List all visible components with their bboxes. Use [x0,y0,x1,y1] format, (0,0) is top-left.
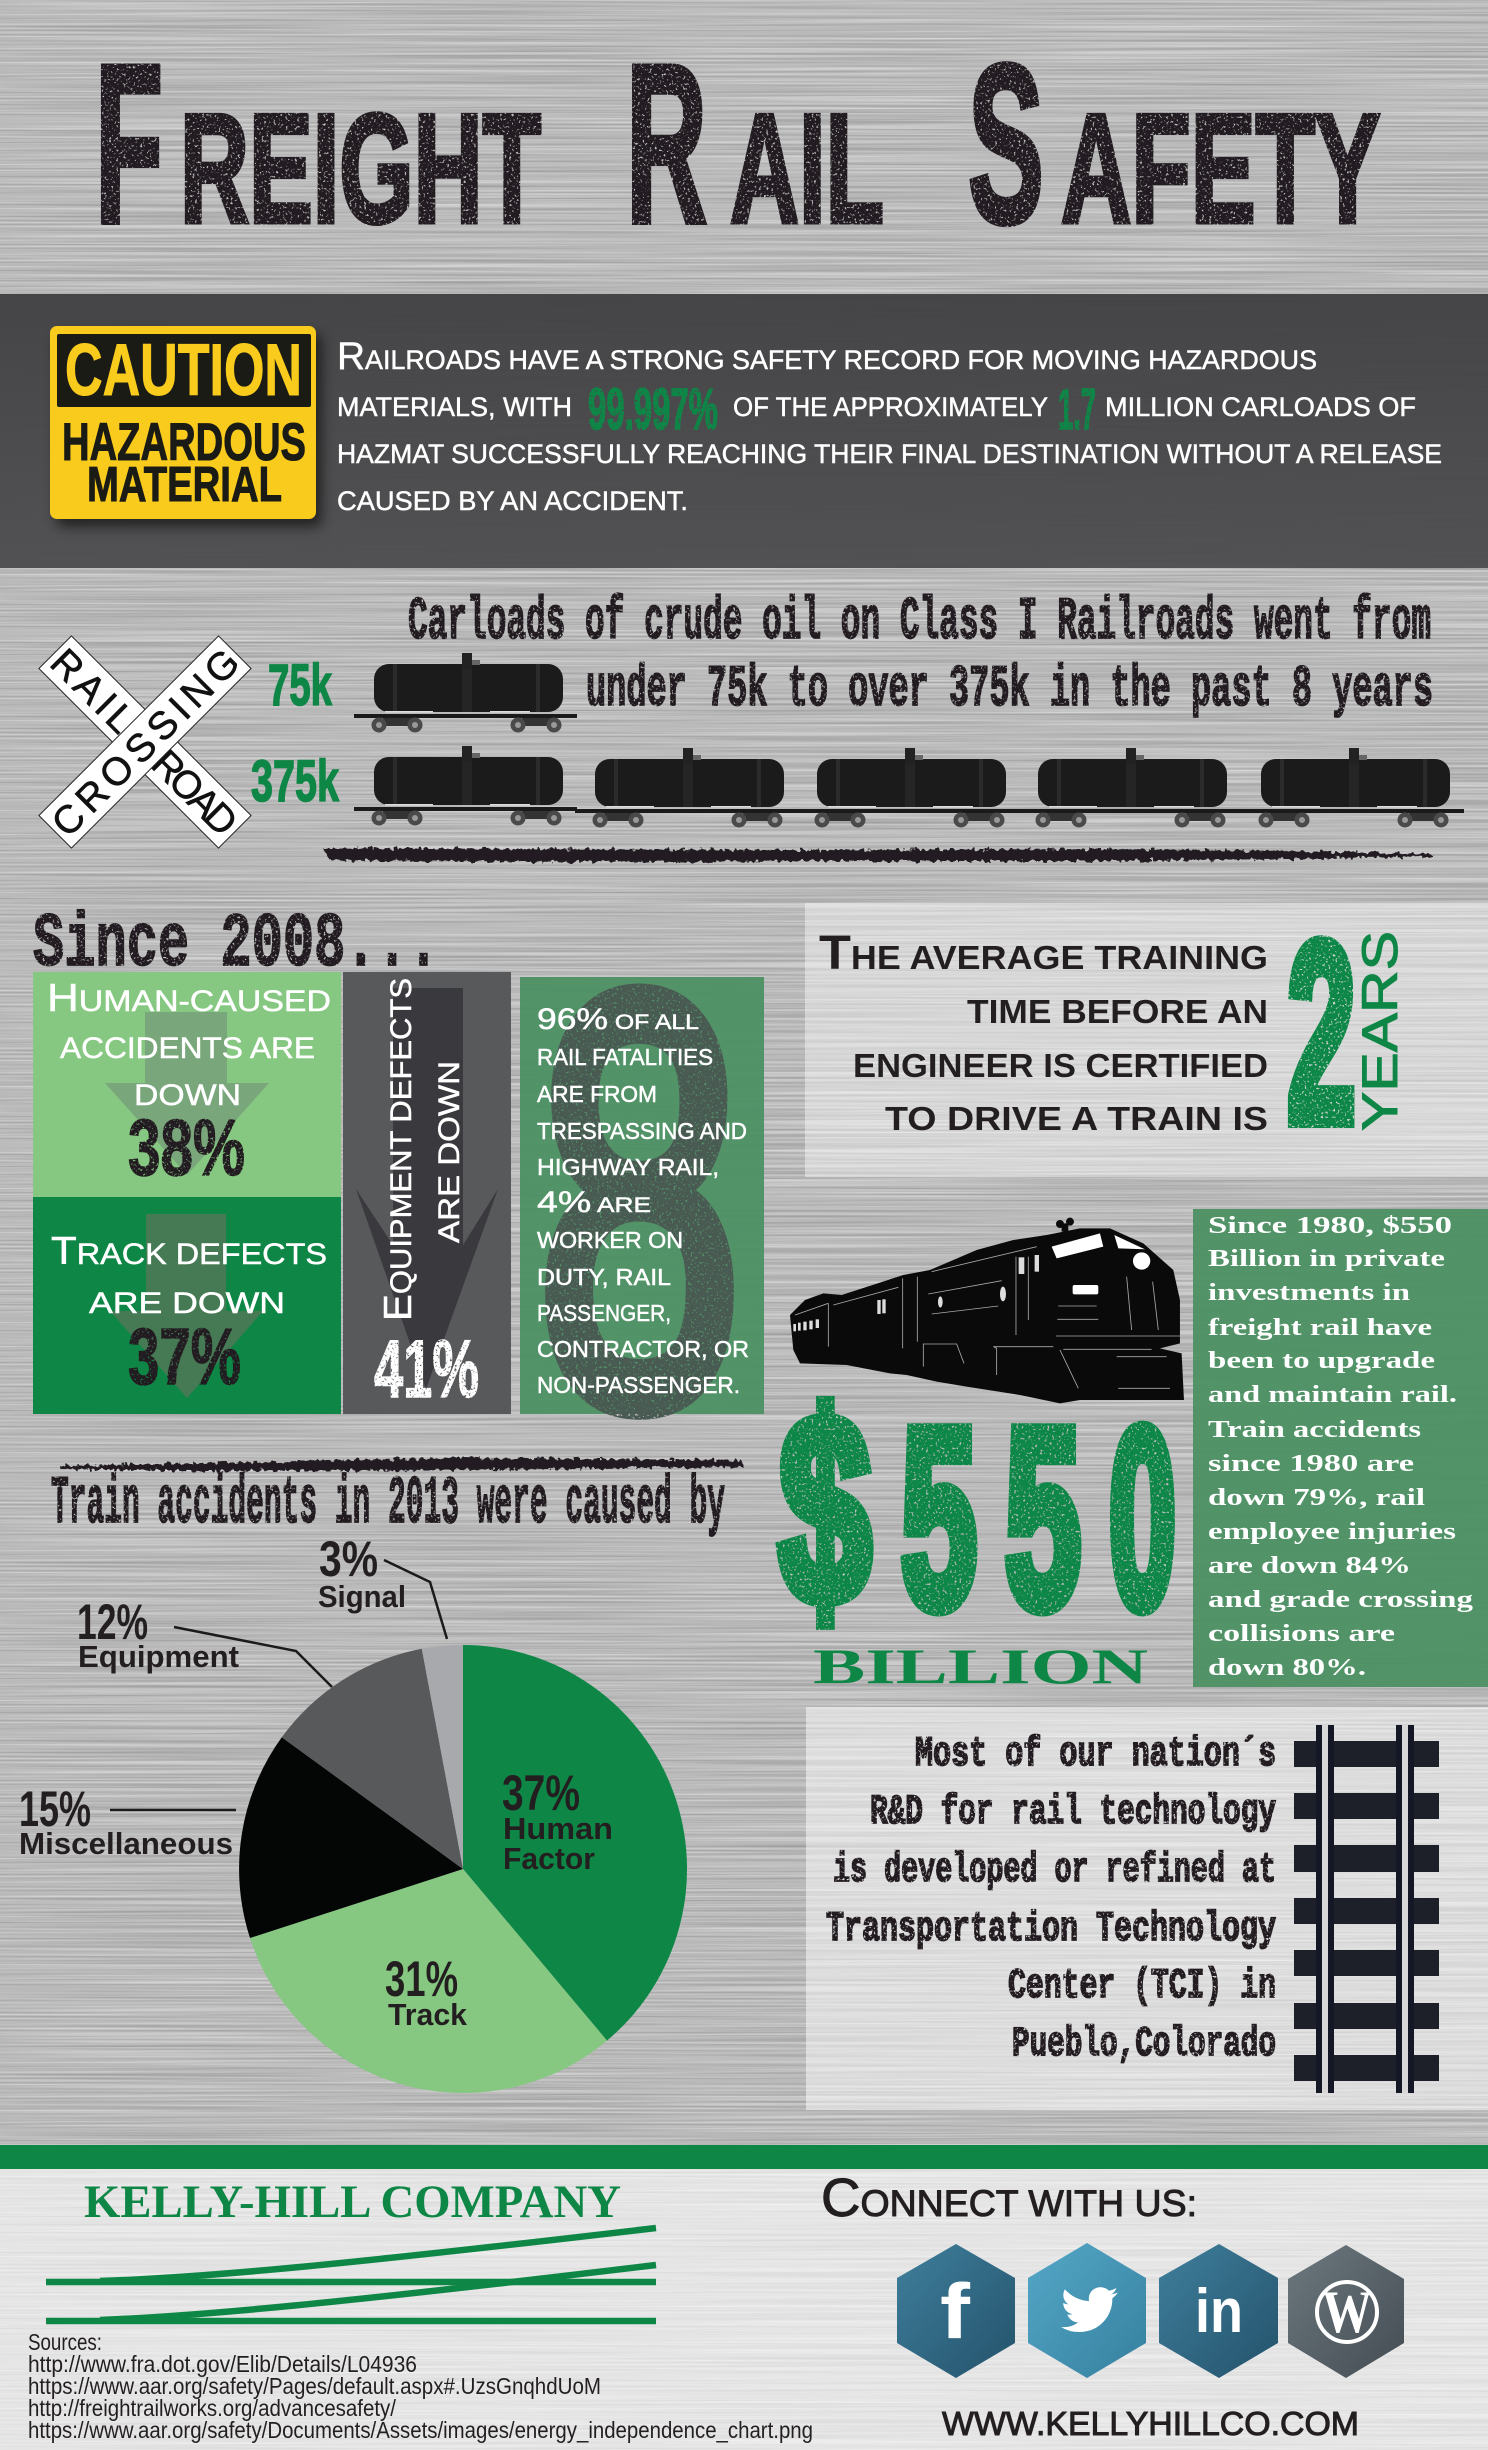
panel: research and development: Transportation Technology [826,1905,1276,1953]
label: 37 percent human factor: 37% [502,1765,580,1821]
label: 31 percent track: Track [388,1997,468,2032]
label: 37 percent human factor [502,1765,613,1876]
panel: 96 percent fatalities: 96% OF ALL [537,1003,699,1036]
title: R [626,17,707,270]
text block: hazmat safety record: 99.997% [588,377,718,442]
callout: 15 percent miscellaneous [19,1781,236,1861]
text block: hazmat safety record: HAZMAT SUCCESSFULLY REACHING THEIR FINAL DESTINATION WITHOUT A RELEASE [337,439,1442,469]
title: F [95,17,163,270]
panel: human-caused accidents: DOWN [134,1079,241,1112]
label: 37 percent human factor: Factor [503,1841,595,1876]
icon: facebook [897,2244,1015,2378]
icon: linkedin: in [1195,2277,1243,2346]
icon: caution hazardous material sign: HAZARDOUS [62,413,306,472]
label: website: WWW.KELLYHILLCO.COM [942,2405,1359,2442]
heading: carloads of crude oil [408,589,1433,723]
icon: caution hazardous material sign [50,326,322,527]
panel: private investment text: and maintain rail. [1208,1382,1457,1408]
title: REIGHT [180,82,541,255]
panel: 96 percent fatalities: RAIL FATALITIES [537,1044,713,1070]
panel: 96 percent fatalities: DUTY, RAIL [537,1264,671,1290]
label: 31 percent track: 31% [385,1951,458,2007]
icon: linkedin [1159,2244,1278,2378]
icon: large numeral eight: 8 [536,873,743,1527]
panel: training time: THE AVERAGE TRAINING [819,927,1268,980]
icon: caution hazardous material sign: CAUTION [65,330,302,411]
tank car row two, second [575,748,798,828]
callout: 12 percent equipment: 12% [77,1594,148,1650]
number: 550 dollars: $ [779,1360,871,1659]
icon: railroad crossing sign: CROSSING [44,641,248,845]
panel: 96 percent fatalities: NON-PASSENGER. [537,1372,740,1398]
panel: human-caused accidents: HUMAN-CAUSED [47,977,331,1020]
callout: 3 percent signal: 3% [319,1531,378,1587]
callout: 3 percent signal [318,1531,447,1639]
panel: 96 percent fatalities: CONTRACTOR, OR [537,1336,749,1362]
arrow: equipment defects down [356,988,498,1389]
icon: railroad crossing sign: RAIL [42,641,143,742]
panel: equipment defects: EQUIPMENT DEFECTS [377,978,420,1321]
panel: private investment text: Billion in private [1208,1246,1445,1272]
tank car row two, third [797,748,1020,828]
tank car row two, first [354,746,577,826]
panel: private investment text [1193,1209,1488,1687]
title: S [968,17,1044,270]
panel: 96 percent fatalities: ARE FROM [537,1081,657,1107]
panel: training time [805,890,1488,1177]
text block: hazmat safety record: OF THE APPROXIMATELY [733,392,1048,422]
label: years: YEARS [1352,931,1408,1131]
panel: research and development: Most of our nation´s [915,1730,1276,1778]
panel: 96 percent fatalities [520,873,764,1527]
heading: connect with us: CONNECT WITH US: [821,2168,1197,2228]
callout: 15 percent miscellaneous: Miscellaneous [19,1826,233,1861]
text block: hazmat safety record: 1.7 [1058,377,1096,442]
panel: 96 percent fatalities: 4% ARE [537,1186,651,1219]
heading: since 2008: Since 2008... [33,902,439,988]
panel: 96 percent fatalities: WORKER ON [537,1227,683,1253]
callout: 12 percent equipment: Equipment [78,1639,239,1674]
text block: sources: http://www.fra.dot.gov/Elib/Details/L04936 [28,2351,417,2377]
icon: locomotive train [790,1218,1184,1403]
icon: railroad crossing sign: ROAD [143,742,245,845]
icon: railway track [1294,1725,1439,2093]
logo: kelly-hill company: KELLY-HILL COMPANY [84,2176,621,2228]
tank car row two, fourth [1018,748,1241,828]
label: 75k: 75k [268,653,332,718]
panel: training time: TO DRIVE A TRAIN IS [885,1100,1268,1137]
infographic: freight rail safety: 0 [1109,1376,1176,1660]
icon: facebook: f [940,2267,971,2355]
panel: private investment text: employee injuries [1208,1519,1456,1545]
panel: equipment defects: 41% [374,1324,479,1415]
panel: private investment text: since 1980 are [1208,1451,1414,1477]
panel: 96 percent fatalities: HIGHWAY RAIL, [537,1154,719,1180]
panel: research and development: Pueblo,Colorado [1012,2020,1276,2068]
panel: research and development: R&D for rail technology [870,1788,1276,1836]
text block: sources: https://www.aar.org/safety/Documents/Assets/images/energy_independence_chart.png [28,2417,813,2443]
arrow: human-caused down [105,1012,269,1175]
title [95,17,1380,270]
callout: 12 percent equipment [77,1594,332,1687]
panel: private investment text: been to upgrade [1208,1348,1435,1374]
text block: hazmat safety record: RAILROADS HAVE A STRONG SAFETY RECORD FOR MOVING HAZARDOUS [337,335,1317,378]
panel: private investment text: and grade crossing [1208,1587,1473,1613]
logo: kelly-hill company [46,2176,656,2321]
panel: private investment text: are down 84% [1208,1553,1411,1579]
panel: research and development [806,1707,1488,2110]
callout: 3 percent signal: Signal [318,1579,406,1614]
panel: equipment defects [343,972,511,1415]
pie chart: accident causes [239,1645,687,2093]
text block: sources: https://www.aar.org/safety/Pages/default.aspx#.UzsGnqhdUoM [28,2373,601,2399]
panel: human-caused accidents [33,972,341,1197]
text block: hazmat safety record [337,335,1442,516]
panel: private investment text: Train accidents [1208,1417,1421,1443]
text block: sources: Sources: [28,2329,102,2355]
number: 550 dollars: 5 [901,1376,977,1660]
text block: hazmat safety record: CAUSED BY AN ACCIDENT. [337,486,688,516]
panel: private investment text: down 79%, rail [1208,1485,1425,1511]
panel: track defects: ARE DOWN [89,1287,285,1320]
label: 37 percent human factor: Human [503,1811,613,1846]
panel: 96 percent fatalities: PASSENGER, [537,1300,671,1326]
panel: hazardous materials band [0,294,1488,568]
icon: wordpress: W [1322,2279,1372,2345]
text block: sources [28,2329,813,2443]
label: billion: BILLION [813,1638,1148,1694]
text block: hazmat safety record: MILLION CARLOADS OF [1105,392,1416,422]
panel: private investment text: freight rail have [1208,1315,1432,1341]
panel: private investment text: investments in [1208,1280,1410,1306]
number: 550 dollars [779,1360,1176,1660]
panel: private investment text: Since 1980, $550 [1208,1213,1452,1239]
panel: track defects: TRACK DEFECTS [51,1230,327,1273]
title: AIL [730,82,884,255]
panel: equipment defects: ARE DOWN [433,1061,466,1243]
panel: track defects [33,1197,341,1414]
panel: research and development: Center (TCI) in [1008,1962,1276,2010]
arrow: track defects down [110,1214,263,1398]
label: 375k: 375k [251,749,340,814]
panel: human-caused accidents: 38% [128,1103,245,1192]
panel: 96 percent fatalities: TRESPASSING AND [537,1118,747,1144]
callout: 15 percent miscellaneous: 15% [19,1781,91,1837]
label: 31 percent track [385,1951,468,2032]
panel: training time: 2 [1287,890,1356,1176]
icon: caution hazardous material sign: MATERIAL [87,458,282,512]
tank car row two, fifth [1241,748,1464,828]
panel: training time: ENGINEER IS CERTIFIED [853,1047,1268,1084]
icon: wordpress [1288,2245,1404,2378]
icon: twitter [1028,2243,1146,2378]
panel: training time: TIME BEFORE AN [967,993,1268,1030]
number: 550 dollars: 5 [1005,1376,1081,1660]
panel: private investment text: down 80%. [1208,1655,1366,1681]
panel: human-caused accidents: ACCIDENTS ARE [60,1032,315,1065]
panel: research and development: is developed or refined at [833,1846,1276,1894]
icon: tank car row one [354,653,577,732]
text block: hazmat safety record: MATERIALS, WITH [337,392,572,422]
panel: footer [0,2145,1488,2450]
panel: track defects: 37% [128,1312,241,1401]
text block: sources: http://freightrailworks.org/advancesafety/ [28,2395,397,2421]
panel: private investment text: collisions are [1208,1621,1395,1647]
